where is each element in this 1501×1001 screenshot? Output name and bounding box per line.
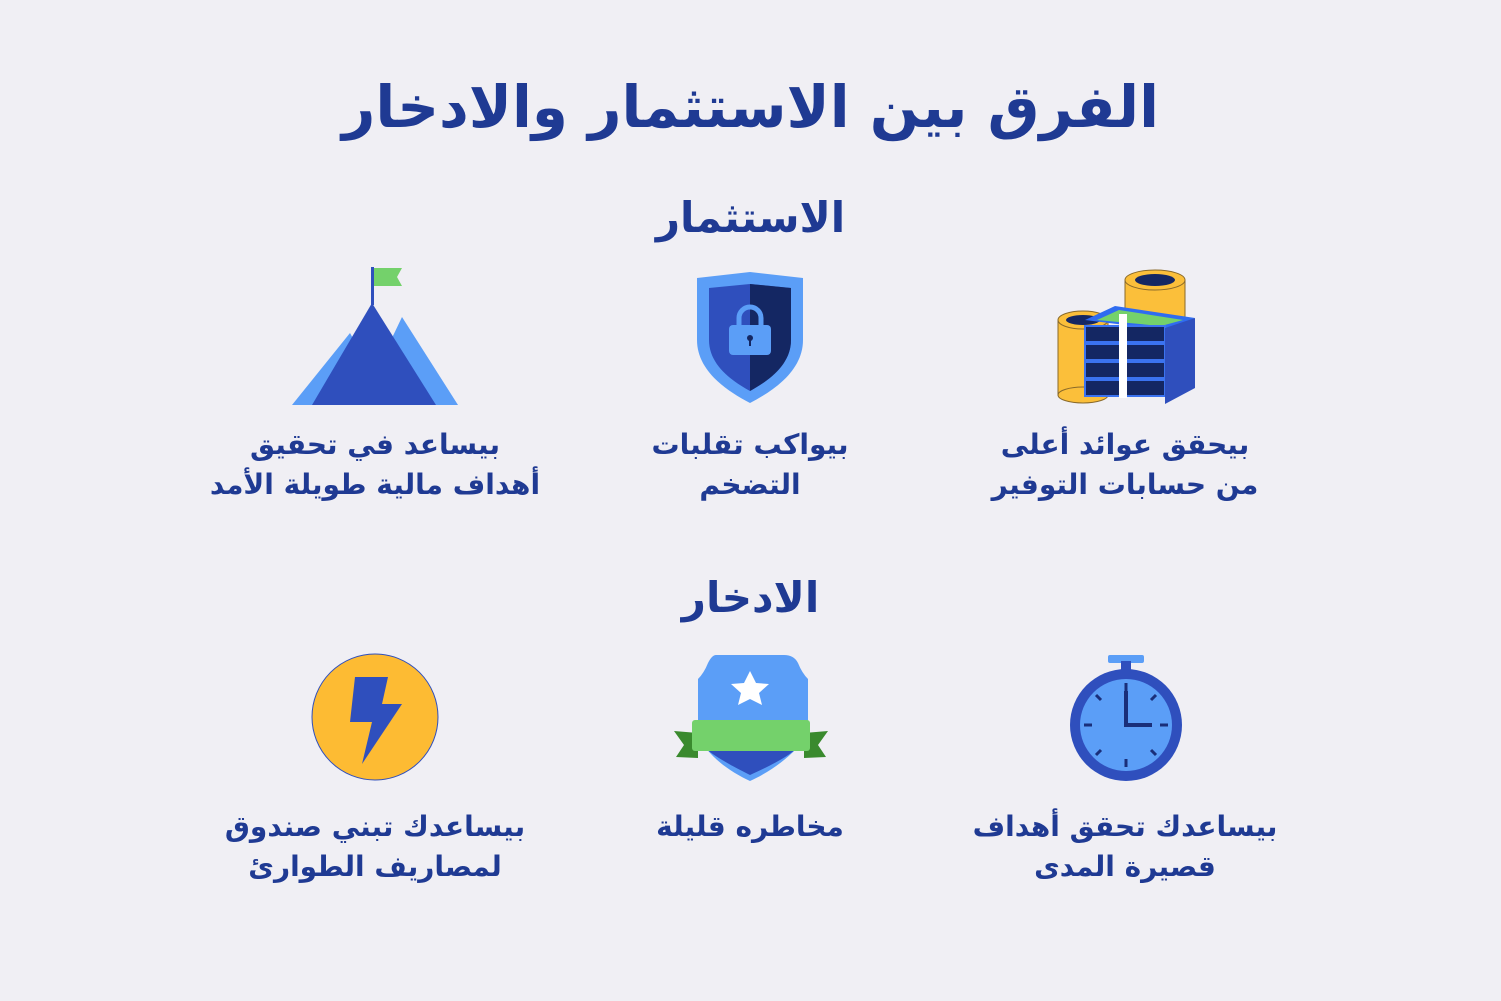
caption: inflation: التضخم <box>699 468 801 501</box>
caption: emergency fund <box>225 810 525 883</box>
caption: short-term goals <box>973 808 1277 883</box>
icon: shield lock <box>697 272 803 403</box>
caption: long-term goals: بيساعد في تحقيق <box>250 428 500 461</box>
caption: long-term goals: أهداف مالية طويلة الأمد <box>210 468 540 501</box>
icon: badge with star <box>674 655 828 781</box>
caption: emergency fund: لمصاريف الطوارئ <box>248 850 502 883</box>
caption: low risk: مخاطره قليلة <box>656 810 844 843</box>
caption: long-term goals <box>210 428 540 501</box>
caption: higher returns: بيحقق عوائد أعلى <box>1001 428 1249 461</box>
caption: emergency fund: بيساعدك تبني صندوق <box>225 810 525 843</box>
caption: inflation: بيواكب تقلبات <box>652 428 848 461</box>
icon: money and coins <box>1058 270 1195 404</box>
title: الفرق بين الاستثمار والادخار <box>342 73 1159 141</box>
icon: lightning coin <box>312 654 438 780</box>
heading: saving: الادخار <box>682 573 819 622</box>
icon: mountain flag <box>292 267 458 405</box>
caption: higher returns: من حسابات التوفير <box>992 468 1258 501</box>
caption: inflation <box>652 428 848 501</box>
heading: investment: الاستثمار <box>656 193 845 242</box>
caption: short-term goals: قصيرة المدى <box>1034 850 1216 883</box>
caption: short-term goals: بيساعدك تحقق أهداف <box>973 810 1277 843</box>
caption: higher returns <box>990 426 1258 501</box>
icon: stopwatch <box>1070 655 1182 781</box>
